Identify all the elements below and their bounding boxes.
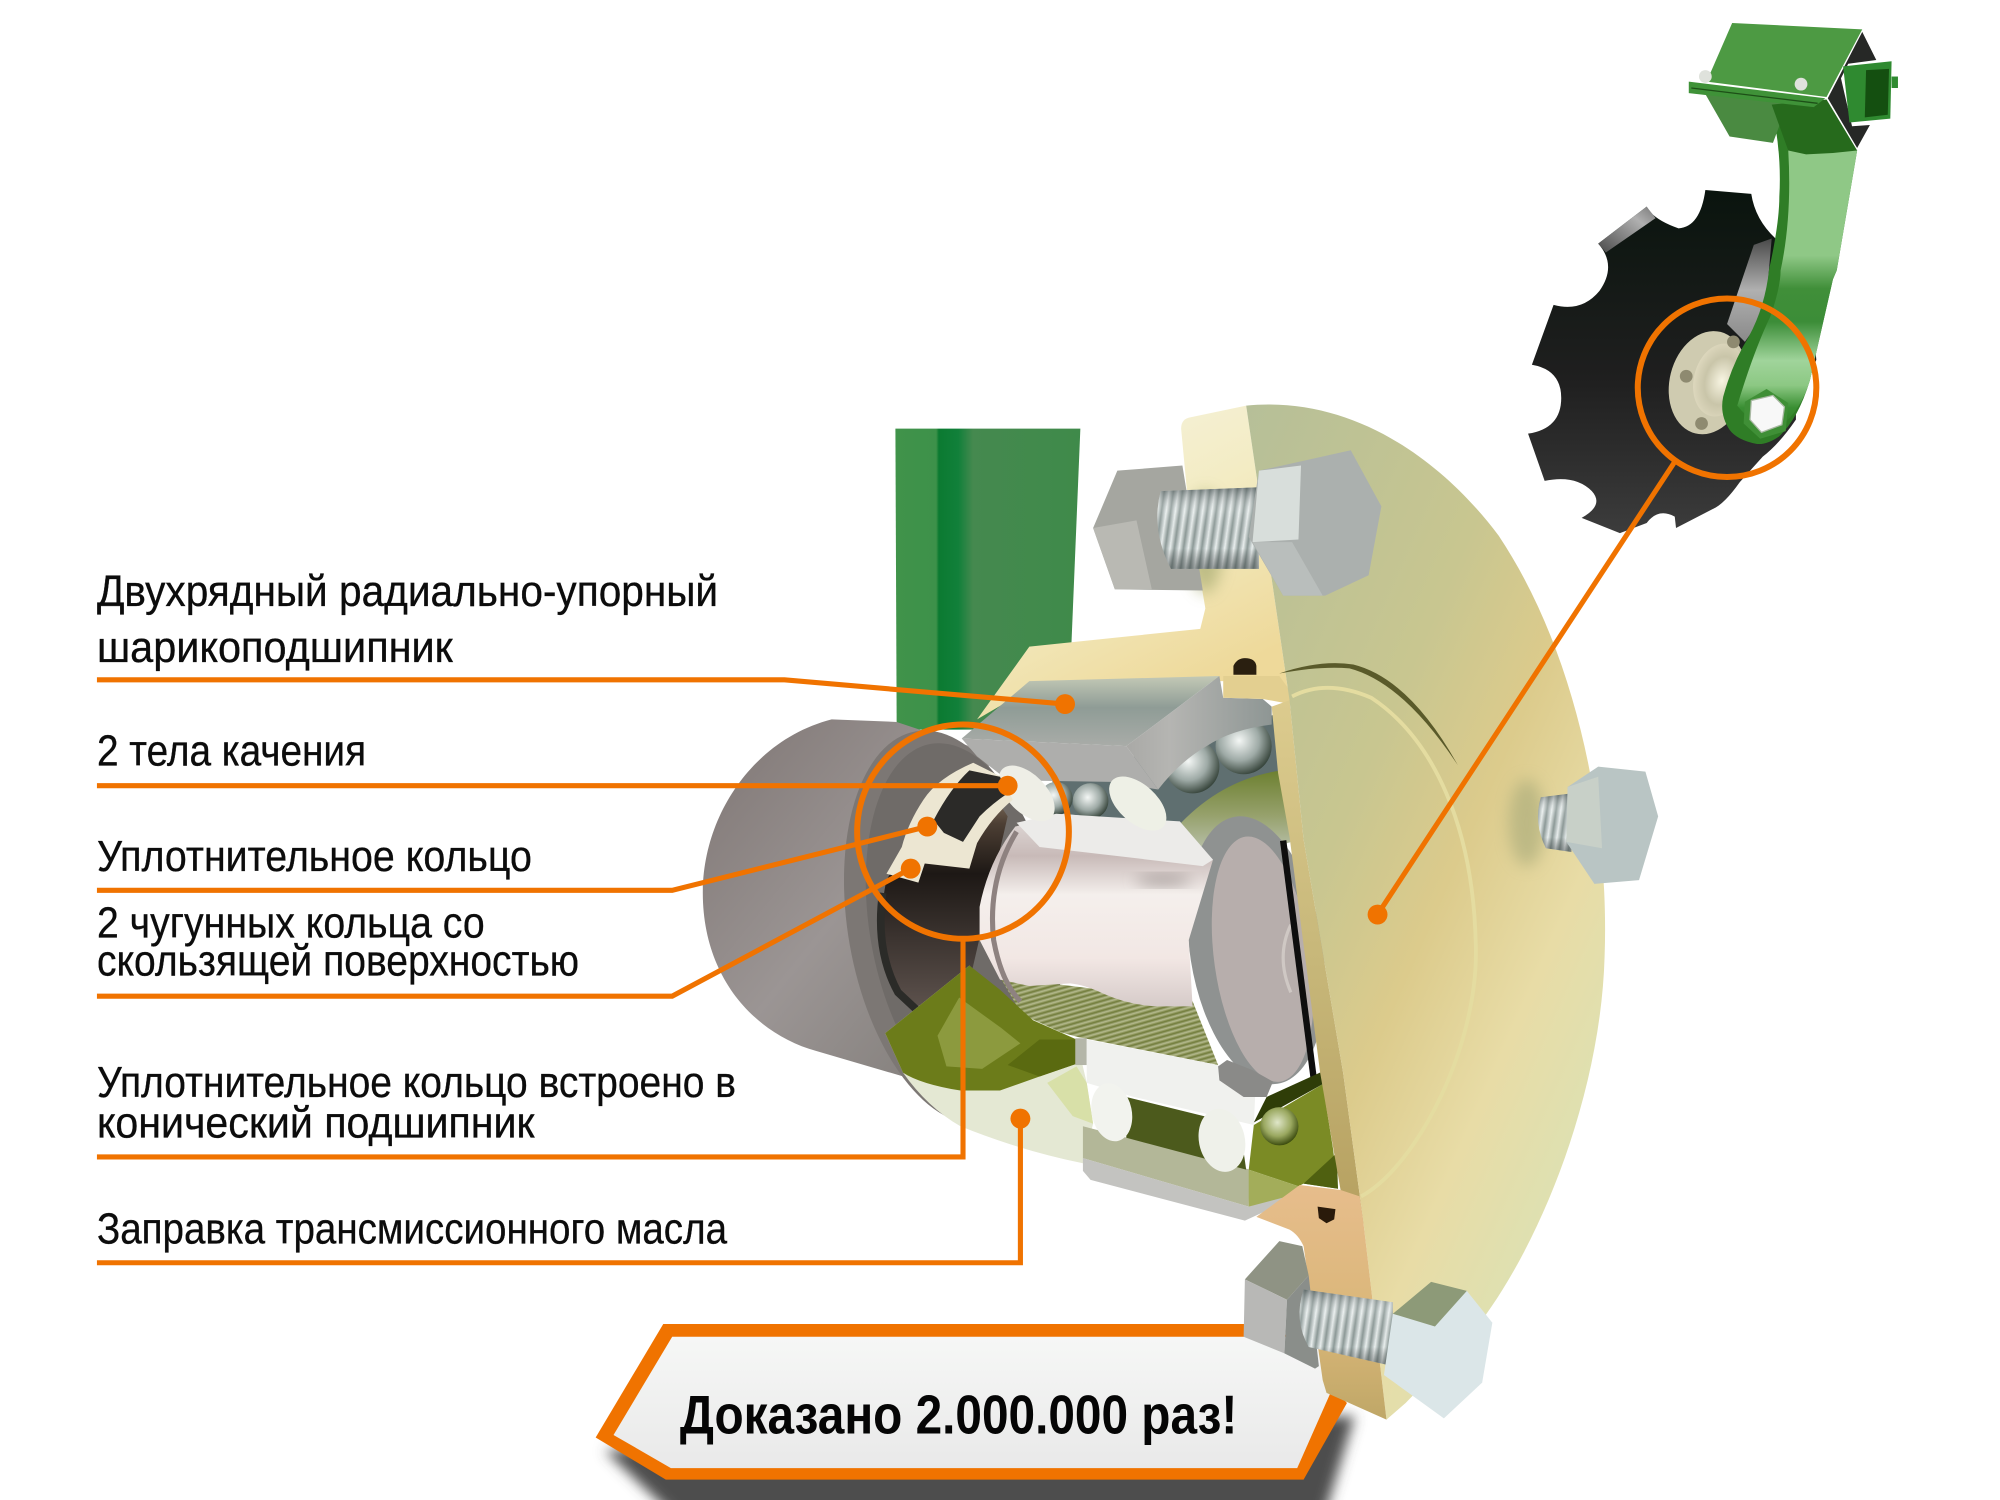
flange dark gap: [1283, 841, 1314, 1079]
top bolt head light facet: [1253, 466, 1301, 542]
olive dark upper lower-right: [1254, 1071, 1323, 1122]
clamp bolts: [1699, 70, 1807, 91]
bottom nut right facet: [1284, 1276, 1319, 1369]
shadow of right bolt on the face: [1509, 779, 1545, 866]
bottom nut front facet: [1244, 1279, 1287, 1353]
bottom bolt with nut: [1244, 1241, 1492, 1418]
housing inner ring: [839, 728, 1087, 1127]
leader: oil filling: [97, 1119, 1020, 1263]
neck of the flange over race: [1223, 676, 1291, 704]
hub of disc: [1658, 323, 1758, 443]
chrome balls: [1216, 718, 1272, 774]
outer race right facet: [1126, 676, 1272, 790]
right nut: [1566, 767, 1658, 884]
label: cast iron rings line 2: скользящей поверхностью: [97, 938, 579, 986]
olive dark triangle: [1304, 1153, 1338, 1189]
leader: seal in tapered bearing: [97, 938, 963, 1157]
banner orange frame: [596, 1324, 1347, 1480]
leader: cast iron rings: [97, 869, 911, 996]
shaft end cap: [1198, 830, 1328, 1088]
top thread shading: [1157, 487, 1259, 569]
top bolt head lower facet: [1253, 542, 1323, 596]
leader: double-row bearing: [97, 680, 1065, 704]
top thread: [1157, 487, 1259, 569]
grey housing cylinder: [703, 719, 995, 1082]
label: bearing line 2: шарикоподшипник: [97, 624, 454, 672]
oil fill plug: [1233, 658, 1256, 675]
outer race upper facet: [962, 676, 1219, 746]
tube opening: [1865, 69, 1889, 117]
shaft shadow smudge: [1135, 876, 1191, 884]
flange large round face: [1246, 405, 1605, 1420]
ball section ovals: [989, 755, 1065, 831]
hub bolts: [1680, 335, 1740, 430]
clamp dark side: [1772, 99, 1857, 154]
face dome shadow crescent: [1279, 663, 1458, 765]
shaft end ring: [1170, 806, 1343, 1094]
pale oil reservoir: [885, 966, 1093, 1163]
arm bolt: [1750, 395, 1784, 432]
notched black disc: [1528, 190, 1816, 533]
olive lighter strip: [1249, 1170, 1298, 1207]
right nut facet: [1566, 777, 1602, 848]
right thread: [1538, 793, 1571, 852]
cream seal ring: [886, 763, 1013, 883]
hub centre cone: [1686, 338, 1753, 422]
detail circle on hub: [857, 724, 1069, 939]
top nut side facet: [1093, 520, 1152, 589]
label: sealing ring: Уплотнительное кольцо: [97, 833, 532, 881]
threaded lower shaft: [1000, 977, 1218, 1065]
bottom head upper facet: [1393, 1282, 1467, 1327]
olive light patch: [938, 997, 1020, 1069]
label: rolling bodies: 2 тела качения: [97, 727, 366, 775]
silver back of the disc: [1727, 239, 1772, 342]
label: cast iron rings: 2 чугунных кольца со: [97, 900, 485, 948]
marker dots: [901, 694, 1387, 1129]
detail circle on machine: [1638, 298, 1816, 477]
bearing hub cutaway assembly: [703, 405, 1605, 1420]
lower ball sections: [1086, 1079, 1137, 1145]
dark inner cavity: [882, 778, 1008, 1006]
label: tapered bearing line 2: конический подшипник: [97, 1100, 535, 1148]
housing ring: [815, 714, 1085, 1141]
bottom thread: [1299, 1290, 1393, 1366]
shaft end inner notch: [1283, 925, 1291, 992]
outer race front facet: [962, 739, 1158, 790]
leader: link to small machine: [1378, 462, 1675, 915]
olive dark patch: [1008, 1040, 1077, 1077]
flange rim band: [1272, 700, 1364, 1223]
banner: proved 2,000,000 times: [596, 1324, 1355, 1500]
bearing inner cage and balls: [1040, 714, 1291, 867]
clamp black gap lower: [1828, 77, 1870, 148]
lower hub cut section: [1256, 1185, 1386, 1420]
shaft left collar groove: [992, 832, 1020, 1001]
lower block top: [1083, 1126, 1250, 1207]
chrome shaft: [980, 814, 1213, 1006]
lower greenish ball: [1260, 1107, 1298, 1145]
label: oil filling: Заправка трансмиссионного масла: [97, 1206, 728, 1254]
grey lip at lower race: [1075, 1038, 1087, 1065]
bottom nut top facet: [1245, 1241, 1309, 1300]
nut shadow on flange: [1188, 491, 1223, 593]
lower grease hole: [1318, 1207, 1335, 1223]
arm bolt washer: [1744, 389, 1788, 439]
right bolt with nut: [1538, 767, 1658, 884]
label: seal in tapered bearing: Уплотнительное кольцо встроено в: [97, 1059, 736, 1107]
banner shadow: [605, 1416, 1355, 1500]
tube nub: [1892, 77, 1898, 88]
right thread shading: [1538, 793, 1571, 852]
banner text: Доказано 2.000.000 раз!: [680, 1384, 1237, 1446]
bottom bolt head: [1384, 1291, 1492, 1418]
leader: rolling bodies: [97, 784, 1008, 788]
lower block grey edge: [1083, 1158, 1297, 1221]
clamp plate: [1689, 82, 1825, 107]
cavity dark rim: [881, 893, 917, 1010]
arm dark edge: [1722, 107, 1857, 444]
olive ring lower right: [1249, 1084, 1338, 1189]
green light wedge: [1047, 1066, 1093, 1124]
tube end: [1843, 61, 1892, 122]
olive oil fill: [885, 966, 1077, 1091]
arm light face: [1737, 151, 1857, 427]
green arm behind hub: [895, 429, 1080, 730]
shaft top light facet: [1017, 814, 1213, 866]
label: double-row angular contact ball bearing: Двухрядный радиально-упорный: [97, 568, 718, 616]
clamp lower body: [1704, 92, 1788, 143]
circlip: [1218, 1060, 1273, 1097]
bearing cavity: [1052, 714, 1291, 867]
lower ball dark pocket: [1126, 1097, 1246, 1170]
lower race white facet: [1087, 1040, 1255, 1125]
top bolt head: [1249, 450, 1381, 596]
clamp top panel: [1707, 23, 1862, 97]
face dome highlight: [1292, 688, 1476, 1196]
clamp black gap upper: [1828, 32, 1876, 98]
leader: sealing ring: [97, 827, 927, 890]
top bolt with nut: [1093, 450, 1381, 596]
small machine: disc coulter on green arm: [1528, 23, 1898, 533]
disc rim highlight: [1598, 207, 1656, 253]
banner plate: [614, 1337, 1332, 1468]
plate joint line: [1691, 88, 1818, 103]
flange cut section: [977, 406, 1290, 719]
black gasket: [934, 770, 1008, 842]
leader lines and markers: [97, 298, 1816, 1263]
olive cage: [1181, 770, 1291, 867]
bottom thread shading: [1299, 1290, 1393, 1366]
top nut: [1093, 466, 1203, 591]
